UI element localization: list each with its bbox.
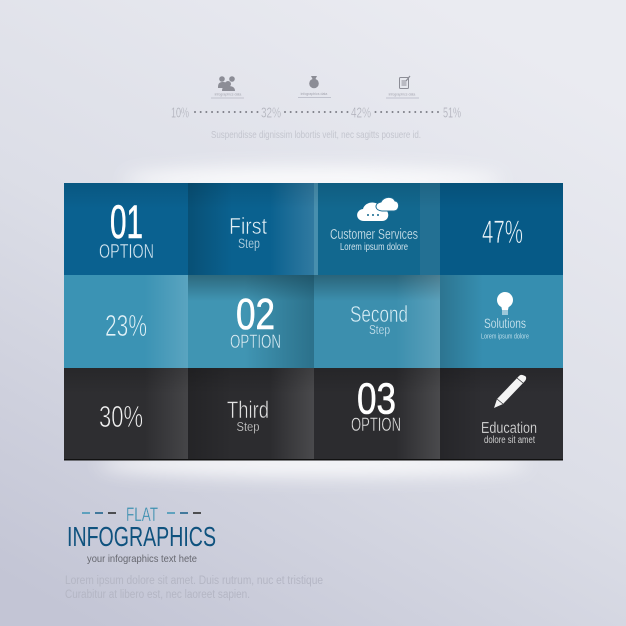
cell: 03 option: 03	[357, 374, 396, 424]
icon: pencil	[494, 375, 526, 408]
cell: second step: Second	[350, 301, 408, 327]
percent scale: 42%	[351, 104, 371, 122]
dashes left	[82, 512, 116, 514]
tile grid	[64, 183, 563, 460]
cell: 03 option: OPTION	[351, 414, 401, 436]
row 1 tiles	[64, 183, 563, 275]
icon: clouds	[357, 197, 399, 221]
cell: first step: Step	[238, 236, 260, 251]
body text: Lorem ipsum dolore sit amet. Duis rutrum, nuc et tristique	[65, 575, 323, 587]
cell: first step	[229, 213, 267, 251]
cell: 02 option: 02	[236, 290, 275, 339]
cell: solutions: Solutions	[484, 315, 526, 331]
cell: education: dolore sit amet	[484, 435, 535, 446]
caption: Suspendisse dignissim lobortis velit, nec sagitts posuere id.	[211, 129, 421, 141]
cell: education	[481, 375, 537, 446]
logo block	[65, 505, 323, 601]
body text: Curabitur at libero est, nec laoreet sapien.	[65, 589, 250, 601]
cell: 01 option: OPTION	[99, 240, 154, 263]
icon captions	[215, 92, 415, 96]
icon: people	[218, 76, 235, 91]
icon captions: infographics data	[215, 92, 241, 96]
row 3 tiles	[64, 368, 563, 460]
cell: first step: First	[229, 213, 267, 239]
cell: 01 option: 01	[110, 195, 143, 248]
dashes right	[167, 512, 201, 514]
percent scale: 51%	[443, 104, 461, 122]
percent scale: 10%	[171, 104, 189, 122]
icon captions: infographics data	[301, 92, 327, 96]
cell: 01 option	[99, 195, 154, 263]
heading: infographics: INFOGRAPHICS	[67, 521, 216, 552]
tagline: your infographics text hete	[87, 553, 197, 565]
cell: 02 option	[230, 290, 281, 353]
icon: notepad	[400, 76, 410, 88]
dotted connectors	[195, 111, 438, 113]
icon captions: infographics data	[389, 92, 415, 96]
cell: 03 option	[351, 374, 401, 436]
cell: second step	[350, 301, 408, 337]
cell: customer services: Lorem ipsum dolore	[340, 242, 408, 253]
cell: solutions: Lorem ipsum dolore	[481, 334, 529, 340]
cell: third step	[227, 397, 269, 434]
row 2 tiles	[64, 275, 563, 368]
icon: money bag	[309, 76, 319, 88]
heading: flat: FLAT	[126, 505, 158, 526]
cell: education: Education	[481, 420, 537, 437]
icon: light bulb	[497, 292, 513, 315]
cell: customer services: Customer Services	[330, 226, 418, 243]
cell: 30%: 30%	[99, 399, 143, 434]
top stats strip	[171, 76, 461, 141]
percent scale	[171, 104, 461, 122]
cell: customer services	[330, 197, 418, 253]
cell: second step: Step	[369, 322, 390, 337]
cell: third step: Step	[236, 419, 260, 434]
cell: third step: Third	[227, 397, 269, 424]
cell: 02 option: OPTION	[230, 331, 281, 353]
percent scale: 32%	[261, 104, 281, 122]
cell: 23%: 23%	[105, 308, 147, 343]
body text	[65, 575, 323, 601]
cell: 47%: 47%	[482, 214, 523, 250]
cell: solutions	[481, 292, 529, 340]
